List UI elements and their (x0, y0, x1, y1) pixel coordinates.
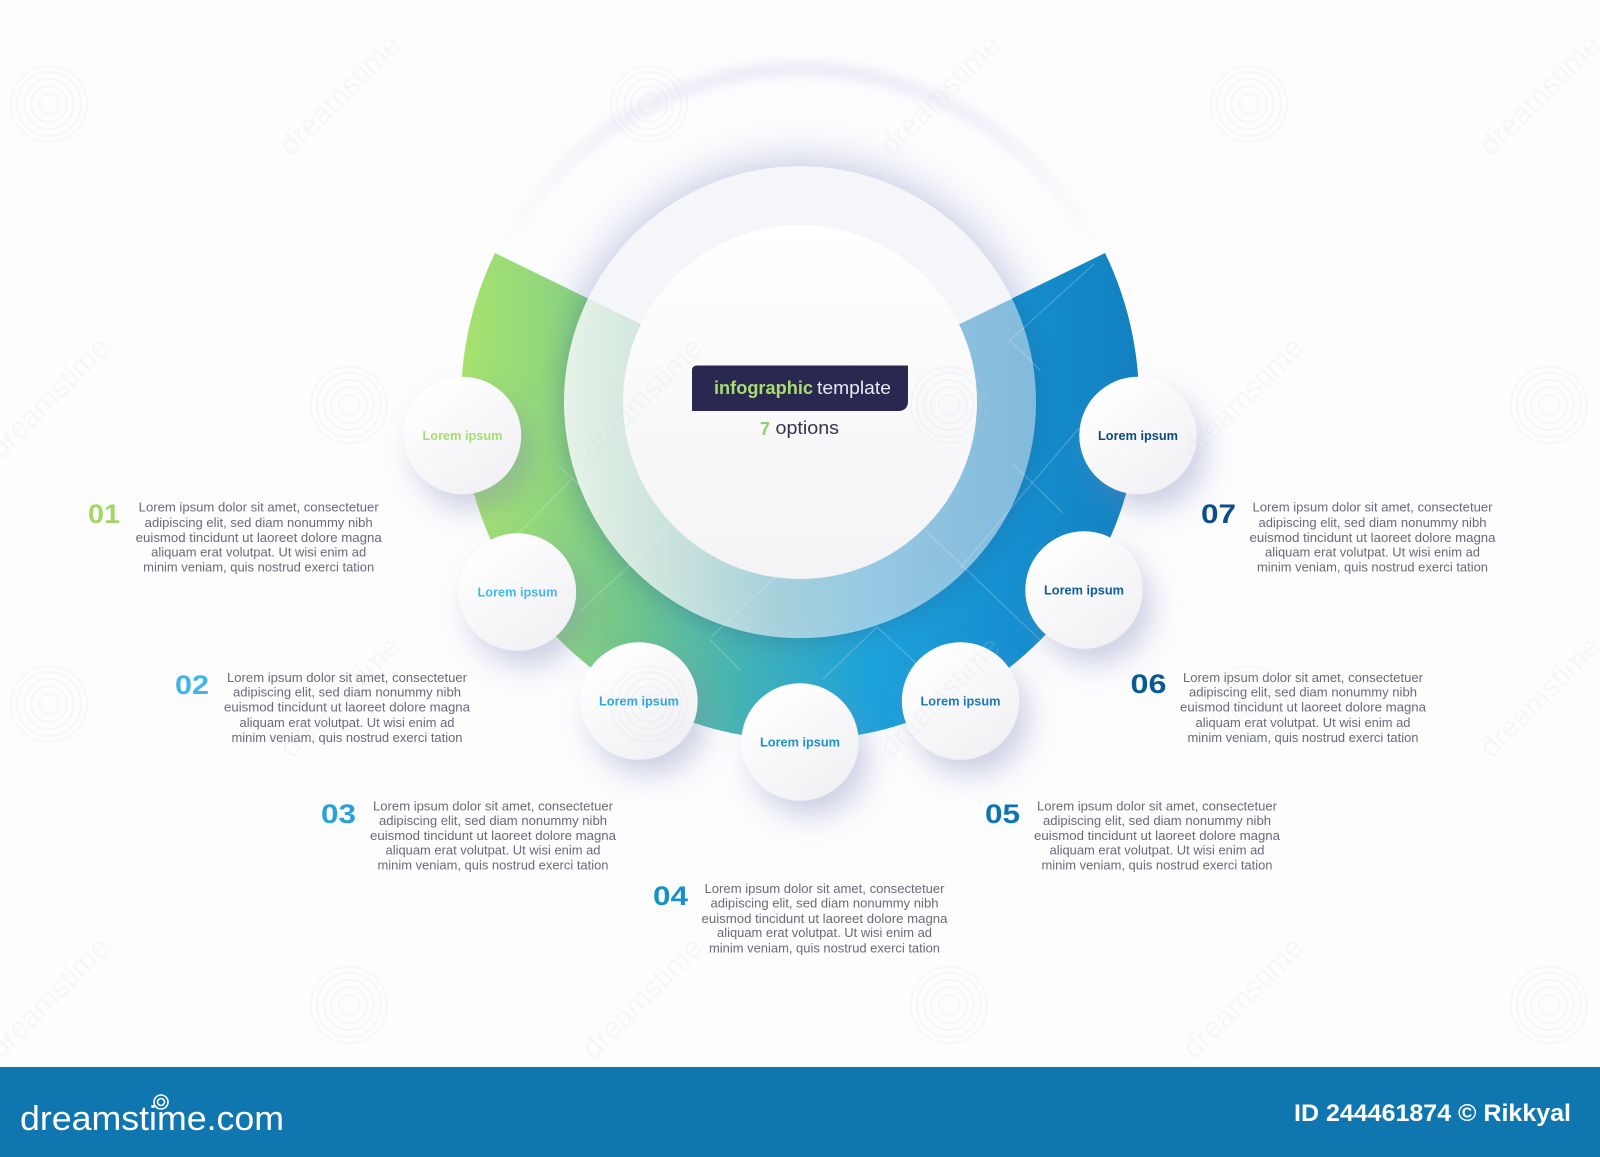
title text (714, 378, 891, 398)
description 03: adipiscing elit, sed diam nonummy nibh (379, 814, 607, 828)
text: dreamstime (575, 331, 709, 465)
options text (760, 418, 839, 439)
options text: 7 (760, 419, 770, 439)
description 03: minim veniam, quis nostrud exerci tation (378, 859, 608, 873)
option circle 3: Lorem ipsum (599, 694, 679, 708)
text: dreamstime (575, 931, 709, 1065)
option 07 text (1201, 499, 1496, 574)
description 04: adipiscing elit, sed diam nonummy nibh (710, 896, 938, 910)
gradient sector (462, 253, 1138, 735)
description 02: minim veniam, quis nostrud exerci tation (232, 731, 462, 745)
description 06: minim veniam, quis nostrud exerci tation (1188, 731, 1418, 745)
option 06 text (1130, 669, 1426, 745)
option 02 text (175, 670, 470, 745)
title label (692, 366, 908, 411)
central circle (623, 225, 977, 579)
description 01: Lorem ipsum dolor sit amet, consectetuer (139, 500, 379, 514)
description 06 (1180, 671, 1426, 745)
number 07: 07 (1201, 499, 1236, 529)
description 06: aliquam erat volutpat. Ut wisi enim ad (1196, 716, 1410, 730)
option circle 2 (459, 533, 576, 651)
description 02: aliquam erat volutpat. Ut wisi enim ad (240, 716, 454, 730)
option circle 5: Lorem ipsum (920, 694, 1000, 708)
description 01: aliquam erat volutpat. Ut wisi enim ad (151, 546, 366, 560)
description 05: euismod tincidunt ut laoreet dolore magna (1034, 829, 1280, 843)
description 04 (702, 882, 948, 956)
footer bar (0, 1067, 1600, 1157)
option 05 text (985, 799, 1280, 873)
description 02 (224, 671, 470, 745)
description 05: adipiscing elit, sed diam nonummy nibh (1043, 814, 1271, 828)
number 06: 06 (1130, 669, 1166, 699)
description 05 (1034, 800, 1280, 873)
description 05: minim veniam, quis nostrud exerci tation (1042, 859, 1272, 873)
description 01: euismod tincidunt ut laoreet dolore magna (136, 531, 382, 545)
option 03 text (321, 799, 616, 873)
option circle 3 (580, 642, 698, 760)
description 04: euismod tincidunt ut laoreet dolore magna (702, 912, 948, 926)
description 03: euismod tincidunt ut laoreet dolore magna (370, 829, 616, 843)
option circle 1 (404, 377, 521, 494)
description 06: euismod tincidunt ut laoreet dolore magna (1180, 700, 1426, 714)
description 02: euismod tincidunt ut laoreet dolore magna (224, 700, 470, 714)
text: dreamstime (273, 28, 407, 162)
description 01: minim veniam, quis nostrud exerci tation (143, 560, 374, 574)
description 06: Lorem ipsum dolor sit amet, consectetuer (1183, 671, 1423, 685)
option circle 6: Lorem ipsum (1044, 582, 1124, 598)
option circle 4: Lorem ipsum (760, 734, 840, 750)
description 05: aliquam erat volutpat. Ut wisi enim ad (1050, 844, 1264, 858)
footer logo: dreamstime.com (20, 1100, 284, 1138)
description 05: Lorem ipsum dolor sit amet, consectetuer (1037, 800, 1277, 814)
option circle 4 (741, 683, 859, 801)
central ring (564, 166, 1036, 638)
center title (692, 366, 908, 439)
description 01: adipiscing elit, sed diam nonummy nibh (145, 516, 373, 530)
description 03 (370, 800, 616, 873)
description 03: Lorem ipsum dolor sit amet, consectetuer (373, 800, 613, 814)
number 01: 01 (88, 499, 120, 529)
description 07: minim veniam, quis nostrud exerci tation (1257, 560, 1488, 574)
option circle 7: Lorem ipsum (1098, 428, 1178, 443)
number 05: 05 (985, 799, 1020, 829)
text: dreamstime (273, 630, 407, 764)
option circle 1: Lorem ipsum (422, 428, 502, 443)
description 06: adipiscing elit, sed diam nonummy nibh (1189, 686, 1417, 700)
description 07: Lorem ipsum dolor sit amet, consectetuer (1252, 500, 1492, 514)
description 02: adipiscing elit, sed diam nonummy nibh (233, 686, 461, 700)
title text: template (817, 378, 891, 398)
top faded arc (564, 61, 1036, 298)
description 07 (1250, 500, 1496, 574)
title text: infographic (714, 378, 813, 398)
description 02: Lorem ipsum dolor sit amet, consectetuer (227, 671, 467, 685)
icon: logo spiral (154, 1095, 168, 1109)
option 01 text (88, 499, 382, 574)
description 07: euismod tincidunt ut laoreet dolore magna (1250, 531, 1496, 545)
description 01 (136, 500, 382, 574)
text: dreamstime (873, 28, 1007, 162)
text: dreamstime (873, 630, 1007, 764)
number 03: 03 (321, 799, 356, 829)
description 07: aliquam erat volutpat. Ut wisi enim ad (1265, 546, 1480, 560)
option circle 7 (1079, 377, 1197, 494)
option circle 5 (902, 642, 1019, 760)
description 04: Lorem ipsum dolor sit amet, consectetuer (704, 882, 944, 896)
option circle 2: Lorem ipsum (478, 584, 558, 600)
text: dreamstime (1176, 331, 1310, 465)
option 04 text (653, 881, 948, 956)
description 07: adipiscing elit, sed diam nonummy nibh (1258, 516, 1486, 530)
description 04: minim veniam, quis nostrud exerci tation (709, 942, 940, 956)
options text: options (776, 418, 839, 438)
description 03: aliquam erat volutpat. Ut wisi enim ad (386, 844, 600, 858)
text: dreamstime (1176, 931, 1310, 1065)
number 04: 04 (653, 881, 688, 911)
option circle 6 (1025, 531, 1143, 649)
footer credit: ID 244461874 © Rikkyal (1294, 1100, 1571, 1127)
description 04: aliquam erat volutpat. Ut wisi enim ad (717, 926, 932, 940)
number 02: 02 (175, 670, 209, 700)
